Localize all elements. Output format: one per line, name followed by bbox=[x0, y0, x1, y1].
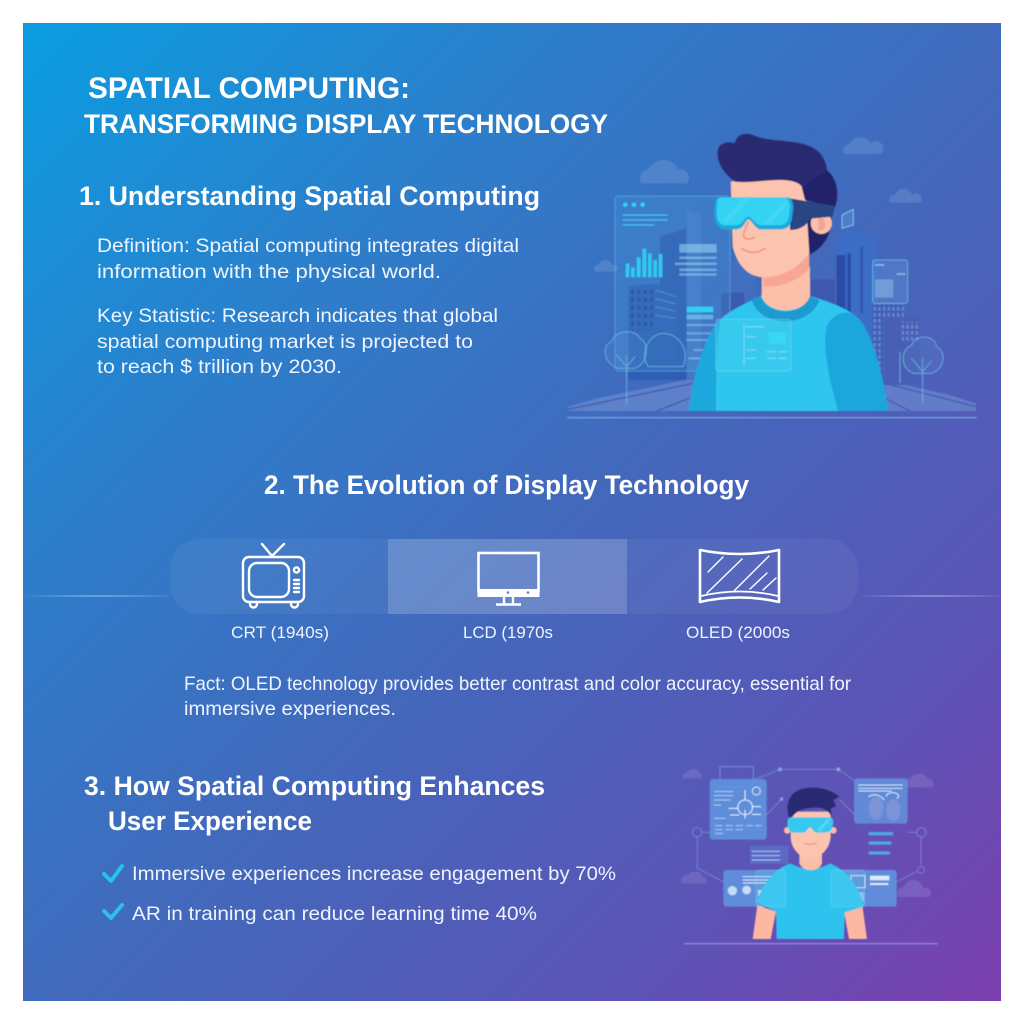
panel: bottom left bbox=[723, 870, 785, 907]
panel over chest bbox=[716, 319, 791, 371]
city buildings bbox=[628, 208, 920, 385]
timeline connector right bbox=[857, 595, 1001, 597]
shirt bbox=[756, 863, 864, 939]
fact text: Fact: OLED technology provides better contrast and color accuracy, essential for bbox=[184, 673, 851, 695]
highlighted LCD segment bbox=[388, 539, 627, 614]
bullet 1: Immersive experiences increase engagement by 70% bbox=[132, 863, 616, 885]
key statistic text: to reach $ trillion by 2030. bbox=[97, 356, 342, 378]
illustration: person with VR headset and city bbox=[567, 134, 977, 418]
right floating card bbox=[873, 260, 908, 303]
display timeline strip bbox=[170, 539, 858, 614]
definition text: Definition: Spatial computing integrates digital bbox=[97, 235, 519, 257]
title bbox=[84, 72, 608, 139]
label: CRT: CRT (1940s) bbox=[231, 623, 329, 642]
ground line bbox=[684, 943, 938, 944]
neck bbox=[799, 848, 822, 870]
VR goggles bbox=[787, 817, 833, 833]
timeline connector left bbox=[23, 595, 170, 597]
icon: check 1 bbox=[104, 866, 122, 881]
fact text: immersive experiences. bbox=[184, 698, 396, 720]
ground line bbox=[567, 417, 977, 418]
section 3 heading: User Experience bbox=[108, 806, 312, 836]
bullet 2: AR in training can reduce learning time 40% bbox=[132, 903, 537, 925]
holographic dashboard panel bbox=[615, 196, 730, 371]
neck bbox=[762, 267, 810, 310]
icon: check 2 bbox=[104, 905, 122, 918]
panel: top right bbox=[854, 778, 908, 824]
key statistic text: Key Statistic: Research indicates that global bbox=[97, 305, 498, 327]
network lines bbox=[692, 769, 926, 883]
definition text bbox=[97, 235, 519, 283]
section 1 heading: 1. Understanding Spatial Computing bbox=[79, 181, 540, 211]
head bbox=[784, 788, 839, 859]
mid text card bbox=[750, 846, 788, 864]
arms bbox=[753, 905, 867, 939]
clouds bbox=[681, 769, 933, 897]
key statistic text bbox=[97, 305, 498, 378]
chest panel overlay bbox=[756, 870, 865, 907]
panel: top left bbox=[710, 767, 767, 840]
label: OLED: OLED (2000s bbox=[686, 623, 790, 642]
collar bbox=[752, 296, 819, 321]
fact text bbox=[184, 673, 851, 720]
mid stacked bars bbox=[870, 834, 892, 853]
title: TRANSFORMING DISPLAY TECHNOLOGY bbox=[84, 109, 608, 139]
VR goggles bbox=[714, 197, 835, 230]
definition text: information with the physical world. bbox=[97, 261, 441, 283]
section 2 heading: 2. The Evolution of Display Technology bbox=[264, 470, 749, 500]
icon: CRT television bbox=[243, 544, 304, 608]
shirt bbox=[688, 296, 888, 411]
key statistic text: spatial computing market is projected to bbox=[97, 331, 473, 353]
label: LCD: LCD (1970s bbox=[463, 623, 553, 642]
title: SPATIAL COMPUTING: bbox=[88, 72, 410, 105]
bar chart bbox=[626, 249, 662, 277]
panel: bottom right bbox=[831, 870, 897, 907]
icon: LCD monitor bbox=[478, 553, 540, 604]
road bbox=[568, 378, 976, 411]
section 3 heading bbox=[84, 771, 545, 836]
trees bbox=[605, 332, 943, 405]
icon: curved OLED screen bbox=[700, 550, 779, 602]
clouds bbox=[594, 137, 922, 272]
section 3 heading: 3. How Spatial Computing Enhances bbox=[84, 771, 545, 801]
head bbox=[718, 134, 837, 286]
illustration: person surrounded by floating panels bbox=[681, 767, 938, 944]
